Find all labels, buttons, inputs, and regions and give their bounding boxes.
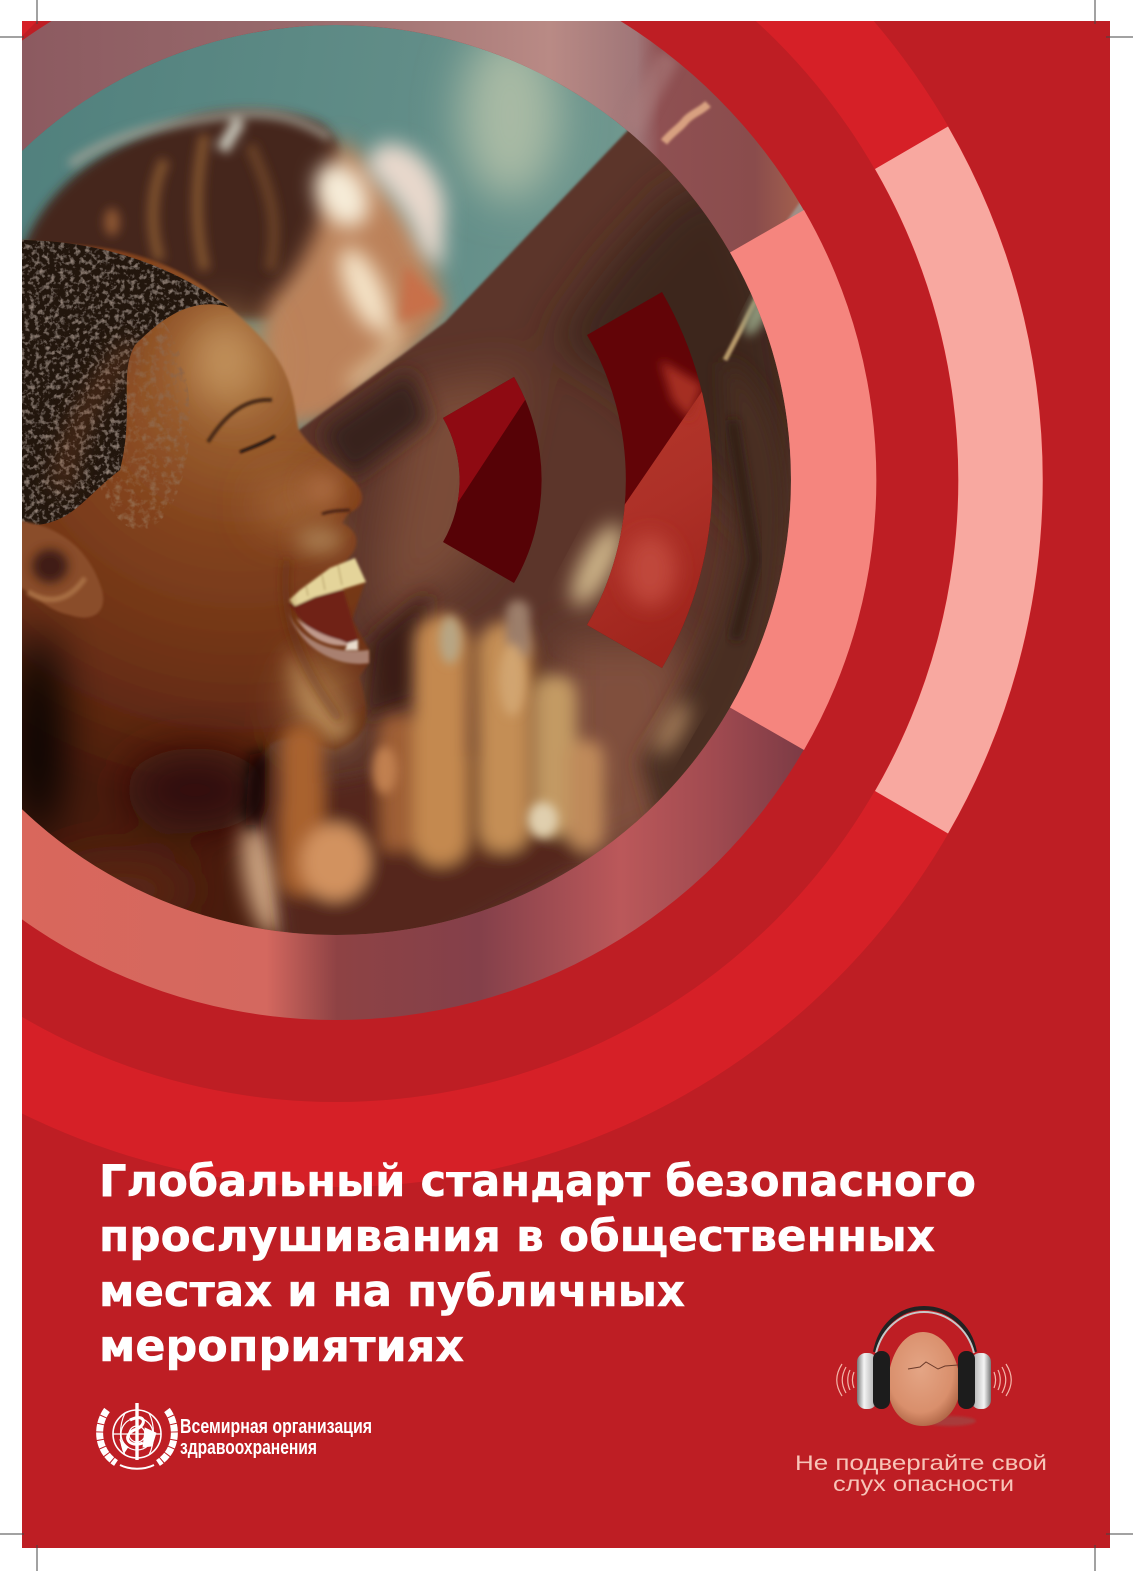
title <box>99 1156 976 1372</box>
small inner dark sound arc <box>443 377 542 583</box>
outer bright red ring <box>0 0 1043 1187</box>
title: Глобальный стандарт безопасного <box>99 1156 976 1207</box>
slogan: слух опасности <box>833 1473 1014 1496</box>
egg <box>888 1332 960 1426</box>
person behind <box>15 110 445 430</box>
photo: singing woman in a crowd <box>22 25 791 935</box>
title: мероприятиях <box>99 1321 464 1372</box>
left ear cup <box>857 1351 890 1409</box>
hair <box>15 240 229 530</box>
right ear cup <box>958 1351 991 1409</box>
middle pink sound arc <box>730 210 876 750</box>
translucent red ring around photo <box>22 21 804 1020</box>
large inner dark sound arc <box>587 292 712 668</box>
slogan <box>795 1452 1047 1496</box>
slogan: Не подвергайте свой <box>795 1452 1047 1475</box>
title: прослушивания в общественных <box>99 1211 935 1262</box>
open mouth <box>288 558 369 664</box>
ear <box>15 520 103 618</box>
WHO logo <box>100 1403 372 1469</box>
woman head and neck <box>15 240 369 960</box>
facial light and shadow <box>14 316 346 920</box>
sound waves <box>837 1364 1011 1396</box>
icon: egg with headphones <box>837 1308 1011 1426</box>
WHO name: Всемирная организация <box>180 1416 372 1438</box>
title: местах и на публичных <box>99 1266 685 1317</box>
headband <box>875 1308 975 1352</box>
blurred praying hands <box>245 615 610 950</box>
WHO name: здравоохранения <box>180 1437 317 1459</box>
raised arm and body <box>191 130 791 935</box>
eye and brow <box>208 400 350 514</box>
outer pale sound arc <box>875 126 1043 834</box>
WHO name <box>180 1416 372 1459</box>
WHO emblem <box>100 1403 174 1469</box>
